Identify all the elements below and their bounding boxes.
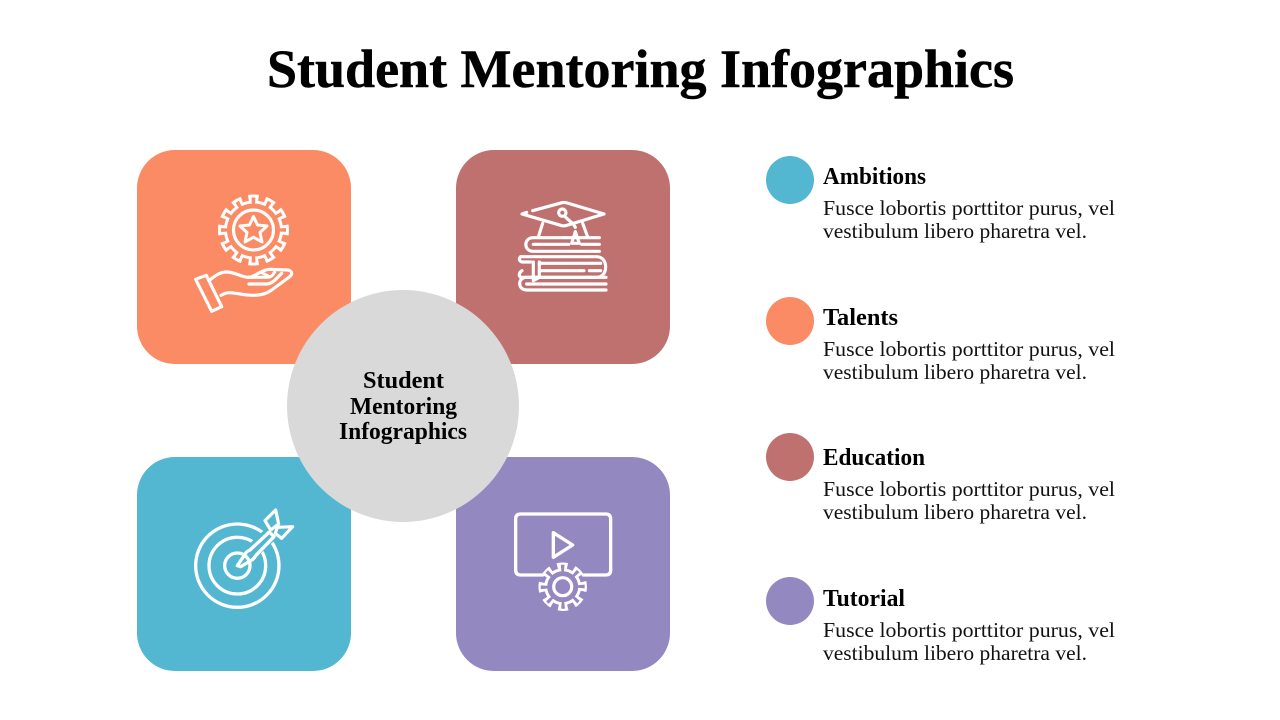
- legend item: Education: [766, 433, 1115, 524]
- title: Student Mentoring Infographics: [267, 39, 1014, 99]
- legend item: Tutorial: vestibulum libero pharetra vel.: [823, 641, 1087, 665]
- legend item: Ambitions: Ambitions: [823, 164, 926, 190]
- panel: purple square: [456, 457, 670, 671]
- legend item: Ambitions: Fusce lobortis porttitor purus, vel: [823, 196, 1115, 220]
- legend item: Talents: Talents: [823, 305, 898, 331]
- legend item: Talents: Fusce lobortis porttitor purus, vel: [823, 337, 1115, 361]
- legend item: Ambitions: vestibulum libero pharetra vel.: [823, 219, 1087, 243]
- center circle: Mentoring: [350, 394, 457, 420]
- legend item: Ambitions: [766, 156, 1115, 243]
- legend item: Education: vestibulum libero pharetra vel.: [823, 500, 1087, 524]
- panel: teal square: [137, 457, 351, 671]
- legend item: Tutorial: Tutorial: [823, 586, 905, 612]
- legend item: Talents: vestibulum libero pharetra vel.: [823, 360, 1087, 384]
- center circle: [287, 290, 519, 522]
- legend item: Education: Education: [823, 445, 925, 471]
- icon: graduation cap on books: [519, 202, 606, 290]
- legend item: Education: Fusce lobortis porttitor purus, vel: [823, 477, 1115, 501]
- legend item: Tutorial: [766, 577, 1115, 665]
- panel: orange square: [137, 150, 351, 364]
- icon: target with dart: [196, 510, 293, 607]
- panel: rose square: [456, 150, 670, 364]
- center circle: Infographics: [339, 419, 467, 445]
- icon: video screen with gear: [516, 514, 611, 611]
- legend item: Talents: [766, 297, 1115, 384]
- center circle: Student: [363, 368, 444, 394]
- icon: gear with star and hand: [196, 195, 292, 311]
- legend item: Tutorial: Fusce lobortis porttitor purus, vel: [823, 618, 1115, 642]
